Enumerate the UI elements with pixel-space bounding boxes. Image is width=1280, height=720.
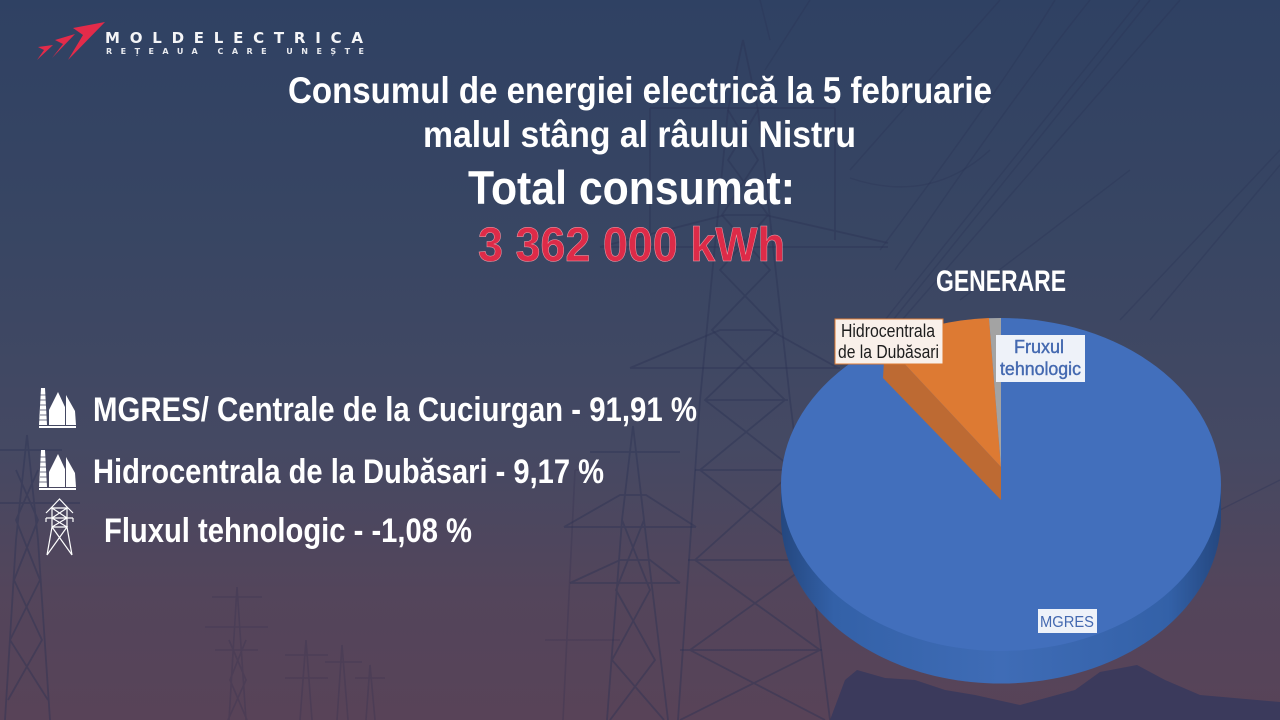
- logo tagline: REȚEAUA CARE UNEȘTE: [106, 47, 364, 57]
- pie slice: Dubăsari: [885, 318, 1001, 467]
- logo icon: red arrows: [37, 22, 105, 60]
- label: technological flow: Fruxul: [1014, 337, 1064, 357]
- text: technological flow share: Fluxul tehnologic - -1,08 %: [104, 512, 472, 550]
- label: Dubăsari: de la Dubăsari: [838, 342, 939, 362]
- label: Dubăsari: Hidrocentrala: [841, 321, 936, 341]
- pie slice: MGRES: [781, 318, 1221, 651]
- label: technological flow: [996, 335, 1085, 382]
- pie chart: generation: [781, 318, 1221, 684]
- list item: Dubăsari: [39, 450, 604, 491]
- text: Dubăsari share: Hidrocentrala de la Dubăsari - 9,17 %: [93, 453, 604, 491]
- list item: MGRES: [39, 388, 697, 429]
- label: MGRES: MGRES: [1040, 614, 1094, 631]
- icon: power plant: [39, 388, 76, 428]
- total consumed value: 3 362 000 kWh: [478, 219, 785, 272]
- title: Consumul de energiei electrică la 5 februarie: [288, 70, 992, 111]
- text: MGRES share: MGRES/ Centrale de la Cuciurgan - 91,91 %: [93, 391, 697, 429]
- chart heading: GENERARE: [936, 265, 1066, 298]
- pie slice wall: Dubăsari: [883, 343, 1001, 500]
- icon: pylon: [46, 499, 73, 555]
- pie side wall: [781, 484, 1221, 684]
- logo wordmark: MOLDELECTRICA: [105, 29, 363, 47]
- title: [288, 70, 992, 155]
- total consumed label: Total consumat:: [468, 161, 795, 214]
- logo: Moldelectrica: [37, 22, 364, 60]
- list item: technological flow: [46, 499, 472, 555]
- label: MGRES: [1038, 609, 1097, 633]
- pie slice: technological flow: [989, 318, 1001, 467]
- icon: hydro plant: [39, 450, 76, 490]
- title: malul stâng al râului Nistru: [423, 114, 856, 155]
- label: Dubăsari: [835, 319, 943, 364]
- label: technological flow: tehnologic: [1000, 359, 1081, 379]
